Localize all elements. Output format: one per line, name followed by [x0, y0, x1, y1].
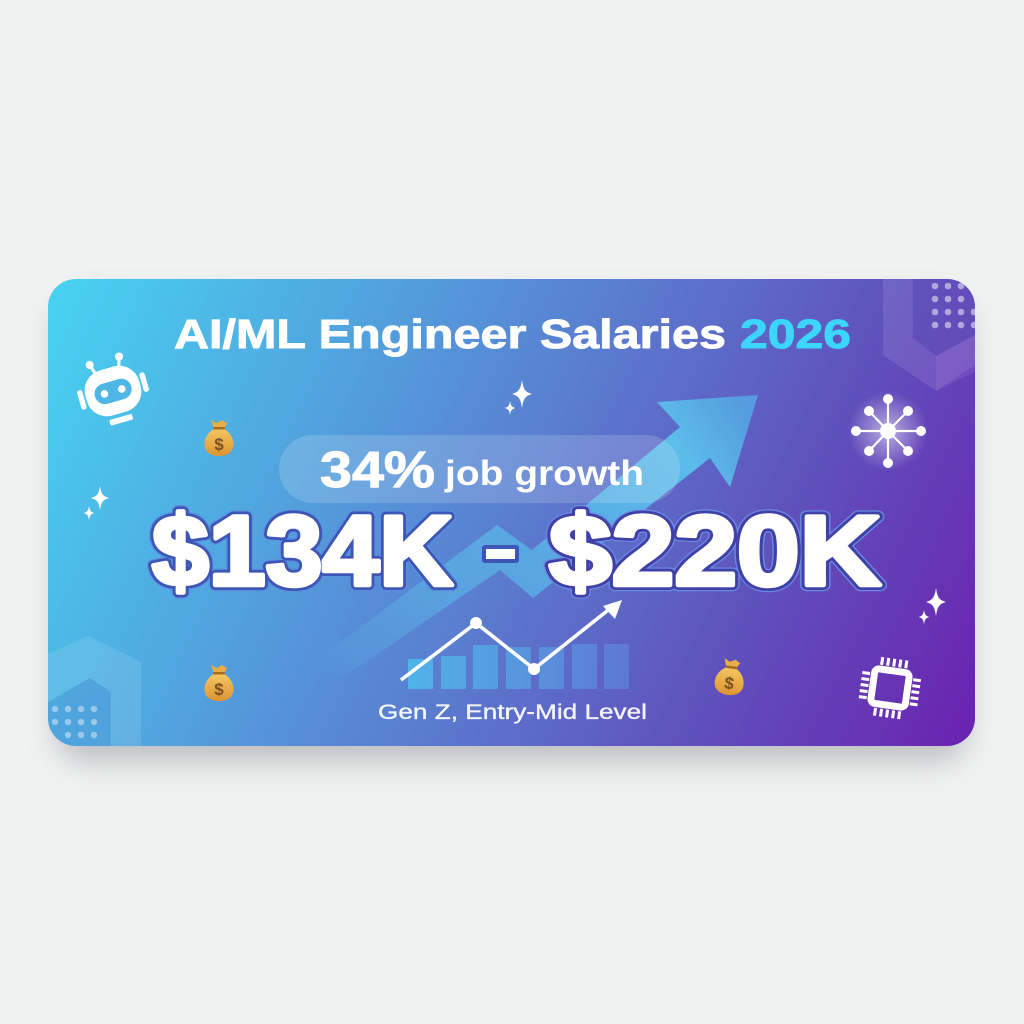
salary range: $134K [152, 495, 453, 606]
icon: sparkles left [84, 486, 109, 520]
decoration: top-right hexagon with dots [883, 279, 975, 391]
icon: chip [857, 655, 923, 721]
job growth pill: job growth [444, 454, 644, 493]
icon: money bag bottom right [713, 657, 747, 697]
salary range: $134K [152, 495, 453, 606]
card shadow [56, 300, 967, 762]
panel: gradient card [48, 279, 975, 746]
salary range: $220K [549, 495, 881, 606]
icon: network node [848, 391, 928, 471]
salary range: $134K [152, 495, 453, 606]
salary range: $220K [549, 495, 881, 606]
decoration: bottom-left hexagon with dots [48, 636, 141, 746]
subtitle: Gen Z, Entry-Mid Level [378, 701, 647, 724]
bar and line chart [401, 600, 629, 689]
icon: sparkles top [504, 380, 532, 415]
salary range [152, 495, 881, 606]
title: AI/ML Engineer Salaries [174, 311, 726, 357]
icon: sparkles right [918, 588, 946, 624]
icon: money bag bottom left [204, 665, 234, 701]
icon: money bag bottom left: $ [214, 680, 224, 699]
big growth arrow [290, 395, 758, 680]
icon: robot [69, 347, 156, 432]
salary range: $220K [549, 495, 881, 606]
job growth pill [279, 435, 680, 503]
icon: money bag top left: $ [214, 435, 224, 454]
icon: money bag bottom right: $ [723, 673, 736, 694]
icon: money bag top left [204, 420, 234, 456]
title [174, 311, 851, 357]
job growth pill: 34% [320, 441, 435, 498]
title: 2026 [740, 311, 851, 357]
